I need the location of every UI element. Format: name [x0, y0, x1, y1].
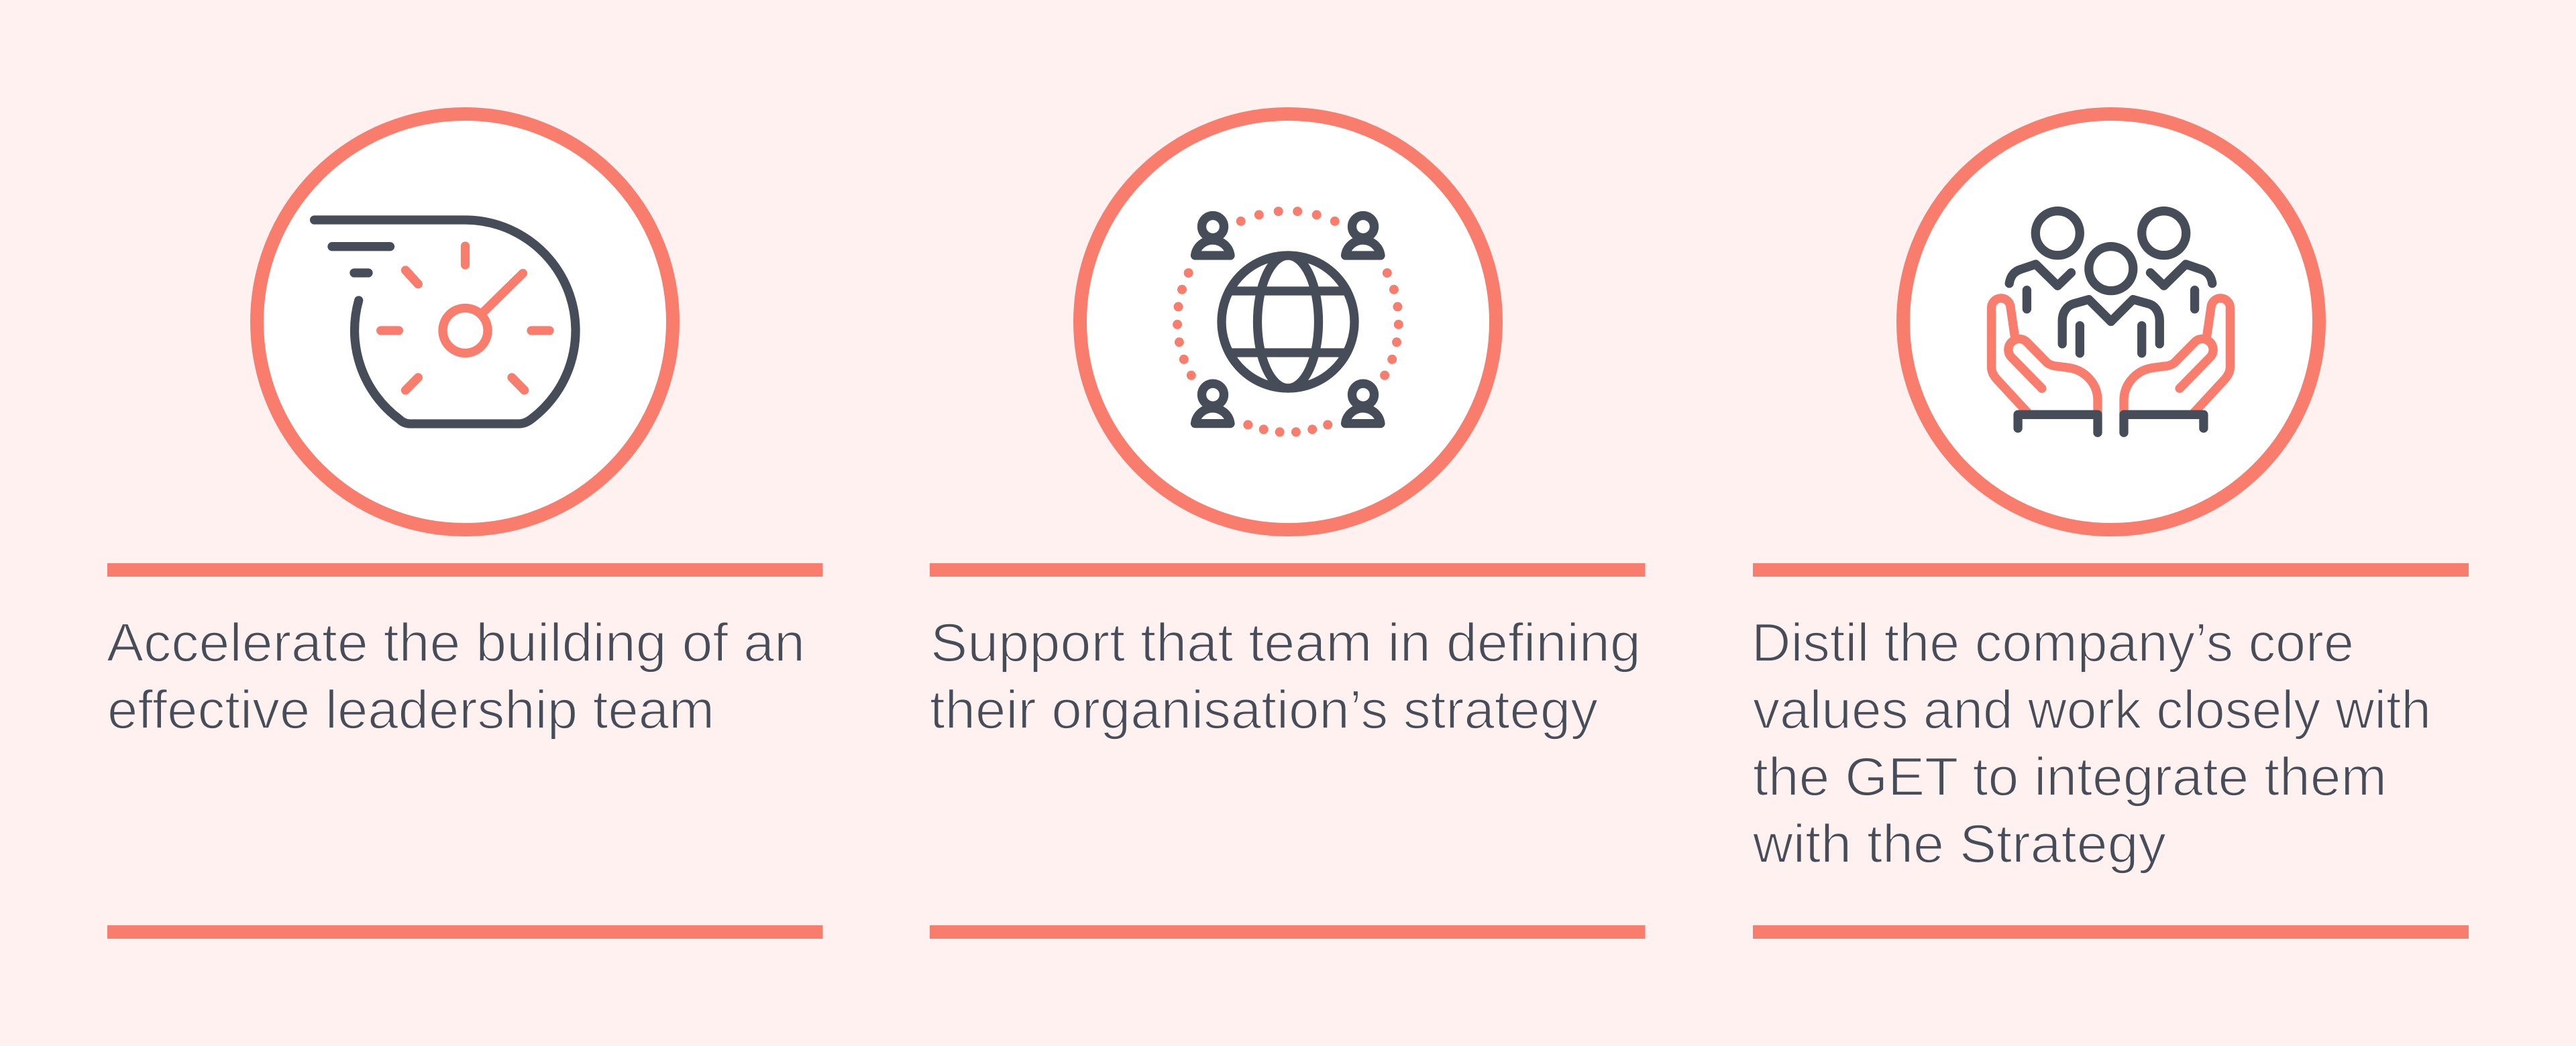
text: accelerate: effective leadership team [107, 680, 714, 740]
text: distil: the GET to integrate them [1753, 747, 2387, 807]
top divider bar [930, 563, 1645, 577]
base lines [2018, 414, 2204, 432]
top divider bar [107, 563, 822, 577]
text: accelerate [107, 613, 805, 740]
text: distil: with the Strategy [1752, 814, 2167, 874]
top divider bar [1753, 563, 2469, 577]
icon: speedometer [315, 220, 576, 424]
people [2009, 211, 2212, 353]
hands [1992, 298, 2230, 414]
circle badge: speedometer [257, 114, 673, 530]
icon: team held in hands [1992, 211, 2230, 432]
text: support [930, 613, 1641, 740]
text: distil: Distil the company’s core [1752, 613, 2354, 673]
panel: distil core values [1752, 114, 2469, 939]
text: accelerate: Accelerate the building of an [107, 613, 805, 673]
text: support: their organisation’s strategy [930, 680, 1599, 740]
circle badge: globe [1080, 114, 1496, 530]
dotted ring [1173, 207, 1403, 437]
people [1195, 216, 1381, 424]
circle badge: people in hands [1903, 114, 2319, 530]
panel: accelerate leadership team [107, 114, 822, 939]
text: distil [1752, 613, 2431, 874]
text: distil: values and work closely with [1753, 680, 2431, 740]
bottom divider bar [1753, 925, 2469, 939]
globe [1222, 255, 1354, 388]
icon: globe with people [1173, 207, 1403, 437]
panel: support strategy [930, 114, 1645, 939]
bottom divider bar [930, 925, 1645, 939]
text: support: Support that team in defining [930, 613, 1641, 673]
bottom divider bar [107, 925, 822, 939]
